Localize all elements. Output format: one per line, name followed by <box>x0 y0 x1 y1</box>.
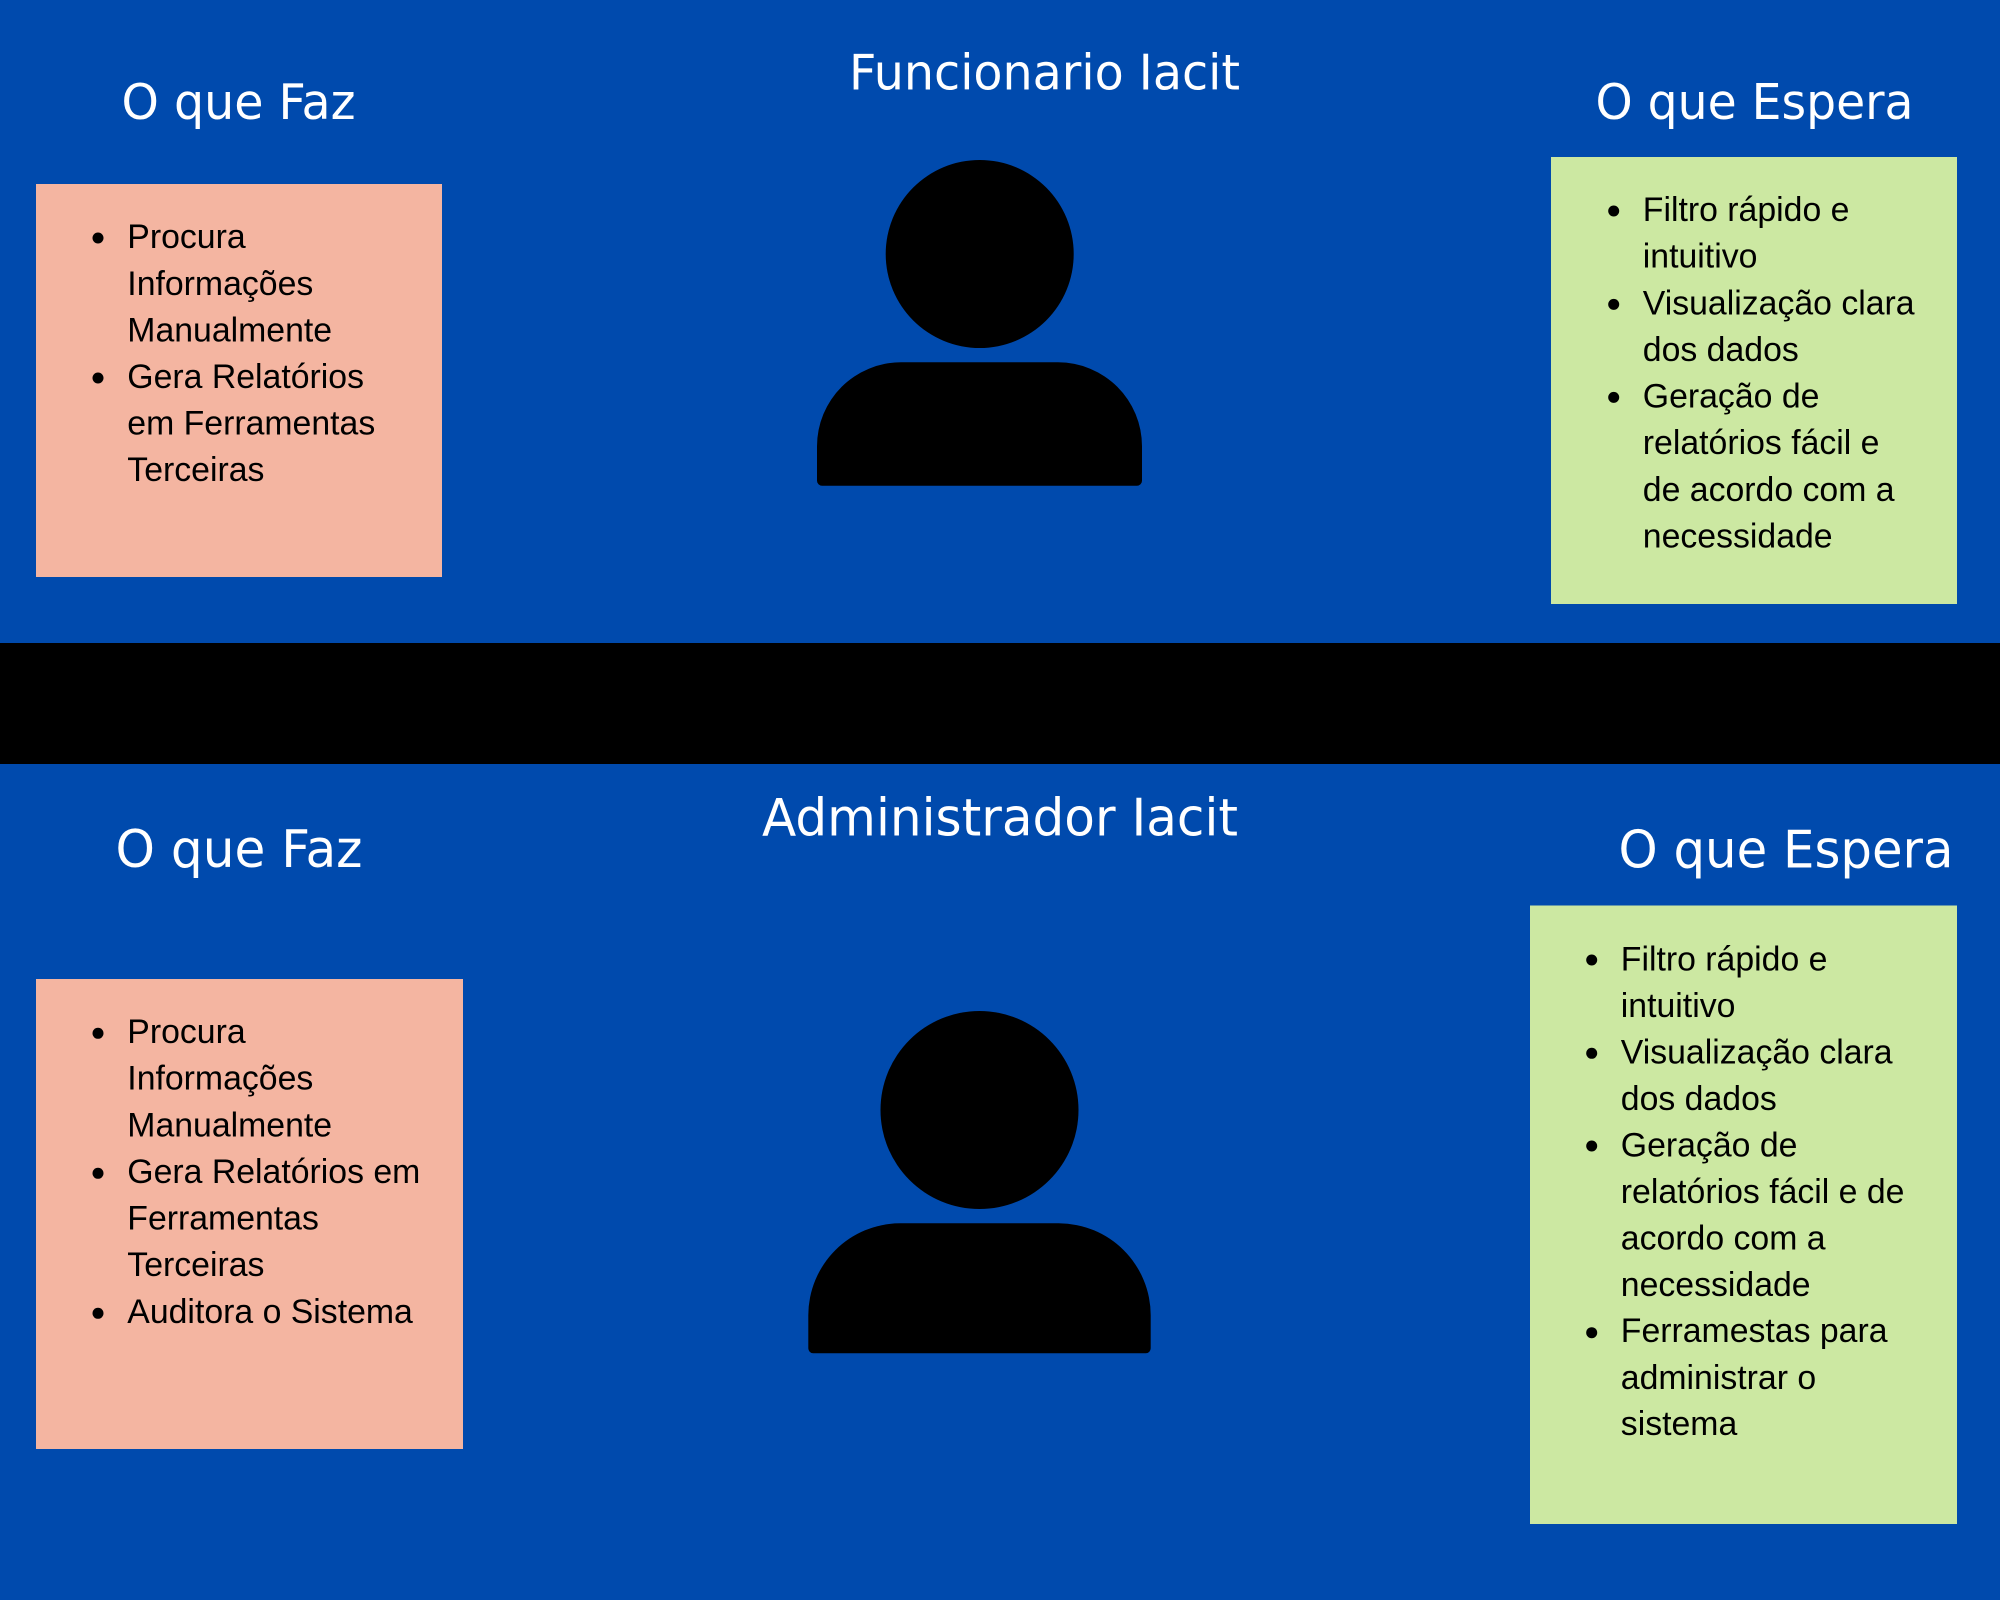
black divider band <box>0 643 2000 764</box>
list item: Visualização clara dos dados: dos dados <box>1643 331 1799 369</box>
list item: Gera Relatórios em Ferramentas Terceiras: Terceiras <box>127 1246 264 1284</box>
list item: Procura Informações Manualmente: Manualmente <box>127 311 332 349</box>
list item: Ferramestas para administrar o sistema: sistema <box>1621 1405 1737 1443</box>
list item: Procura Informações Manualmente: Informações <box>127 1060 313 1098</box>
list item: Gera Relatórios em Ferramentas Terceiras: Terceiras <box>127 451 264 489</box>
list item: Geração de relatórios: Geração de <box>1621 1126 1797 1164</box>
list item: Procura Informações Manualmente: Informações <box>127 265 313 303</box>
list item: Geração de relatórios: relatórios fácil e <box>1643 424 1879 462</box>
section: Funcionario Iacit <box>36 44 1957 604</box>
list item: Geração de relatórios: necessidade <box>1621 1266 1811 1304</box>
list item: Geração de relatórios: Geração de <box>1643 378 1819 416</box>
list item: Procura Informações Manualmente: Manualmente <box>127 1106 332 1144</box>
heading: Funcionario Iacit: Funcionario Iacit <box>849 44 1240 102</box>
list item: Geração de relatórios <box>1586 1126 1904 1304</box>
list item: Filtro rápido e intuitivo <box>1608 191 1849 276</box>
list item: Visualização clara dos dados <box>1586 1033 1893 1118</box>
list item: Geração de relatórios: necessidade <box>1643 517 1833 555</box>
list item: Gera Relatórios em Ferramentas Terceiras: Ferramentas <box>127 1200 319 1238</box>
list item: Visualização clara dos dados: Visualização clara <box>1621 1033 1893 1071</box>
panel: O que Faz <box>36 184 442 577</box>
list item: Filtro rápido e intuitivo: intuitivo <box>1643 238 1757 276</box>
list item: Geração de relatórios: de acordo com a <box>1643 471 1895 509</box>
heading: O que Faz: O que Faz <box>116 820 362 880</box>
list item: Ferramestas para administrar o sistema <box>1586 1312 1888 1443</box>
list item: Procura Informações Manualmente: Procura <box>127 218 246 256</box>
heading: O que Espera: O que Espera <box>1618 820 1954 880</box>
list item: Filtro rápido e intuitivo: Filtro rápido e <box>1643 191 1849 229</box>
heading: O que Espera: O que Espera <box>1596 73 1914 131</box>
list item: Auditora o Sistema: Auditora o Sistema <box>127 1293 413 1331</box>
list item: Geração de relatórios: acordo com a <box>1621 1220 1826 1258</box>
icon: person <box>808 1011 1151 1353</box>
list item: Gera Relatórios em Ferramentas Terceiras: Gera Relatórios <box>127 358 364 396</box>
heading: O que Faz: O que Faz <box>122 73 356 131</box>
panel: O que Espera <box>1530 906 1957 1524</box>
icon: person <box>817 160 1142 486</box>
list item: Filtro rápido e intuitivo: intuitivo <box>1621 987 1735 1025</box>
heading: Administrador Iacit: Administrador Iacit <box>762 788 1238 848</box>
list item: Visualização clara dos dados <box>1608 284 1915 369</box>
list item: Filtro rápido e intuitivo <box>1586 940 1827 1025</box>
list item: Ferramestas para administrar o sistema: Ferramestas para <box>1621 1312 1888 1350</box>
list item: Ferramestas para administrar o sistema: administrar o <box>1621 1359 1816 1397</box>
list item: Geração de relatórios <box>1608 378 1895 555</box>
list item: Procura Informações Manualmente <box>92 1013 332 1144</box>
panel: O que Espera <box>1551 157 1957 604</box>
list item: Procura Informações Manualmente <box>92 218 332 349</box>
list item: Gera Relatórios em Ferramentas Terceiras: em Ferramentas <box>127 405 375 443</box>
list item: Procura Informações Manualmente: Procura <box>127 1013 246 1051</box>
panel: O que Faz <box>36 979 463 1449</box>
list item: Visualização clara dos dados: Visualização clara <box>1643 284 1915 322</box>
list item: Filtro rápido e intuitivo: Filtro rápido e <box>1621 940 1827 978</box>
list item: Geração de relatórios: relatórios fácil e de <box>1621 1173 1904 1211</box>
section: Administrador Iacit <box>36 788 1957 1524</box>
list item: Gera Relatórios em Ferramentas Terceiras: Gera Relatórios em <box>127 1153 420 1191</box>
list item: Gera Relatórios em Ferramentas Terceiras <box>92 358 375 489</box>
list item: Gera Relatórios em Ferramentas Terceiras <box>92 1153 420 1284</box>
list item: Visualização clara dos dados: dos dados <box>1621 1080 1777 1118</box>
